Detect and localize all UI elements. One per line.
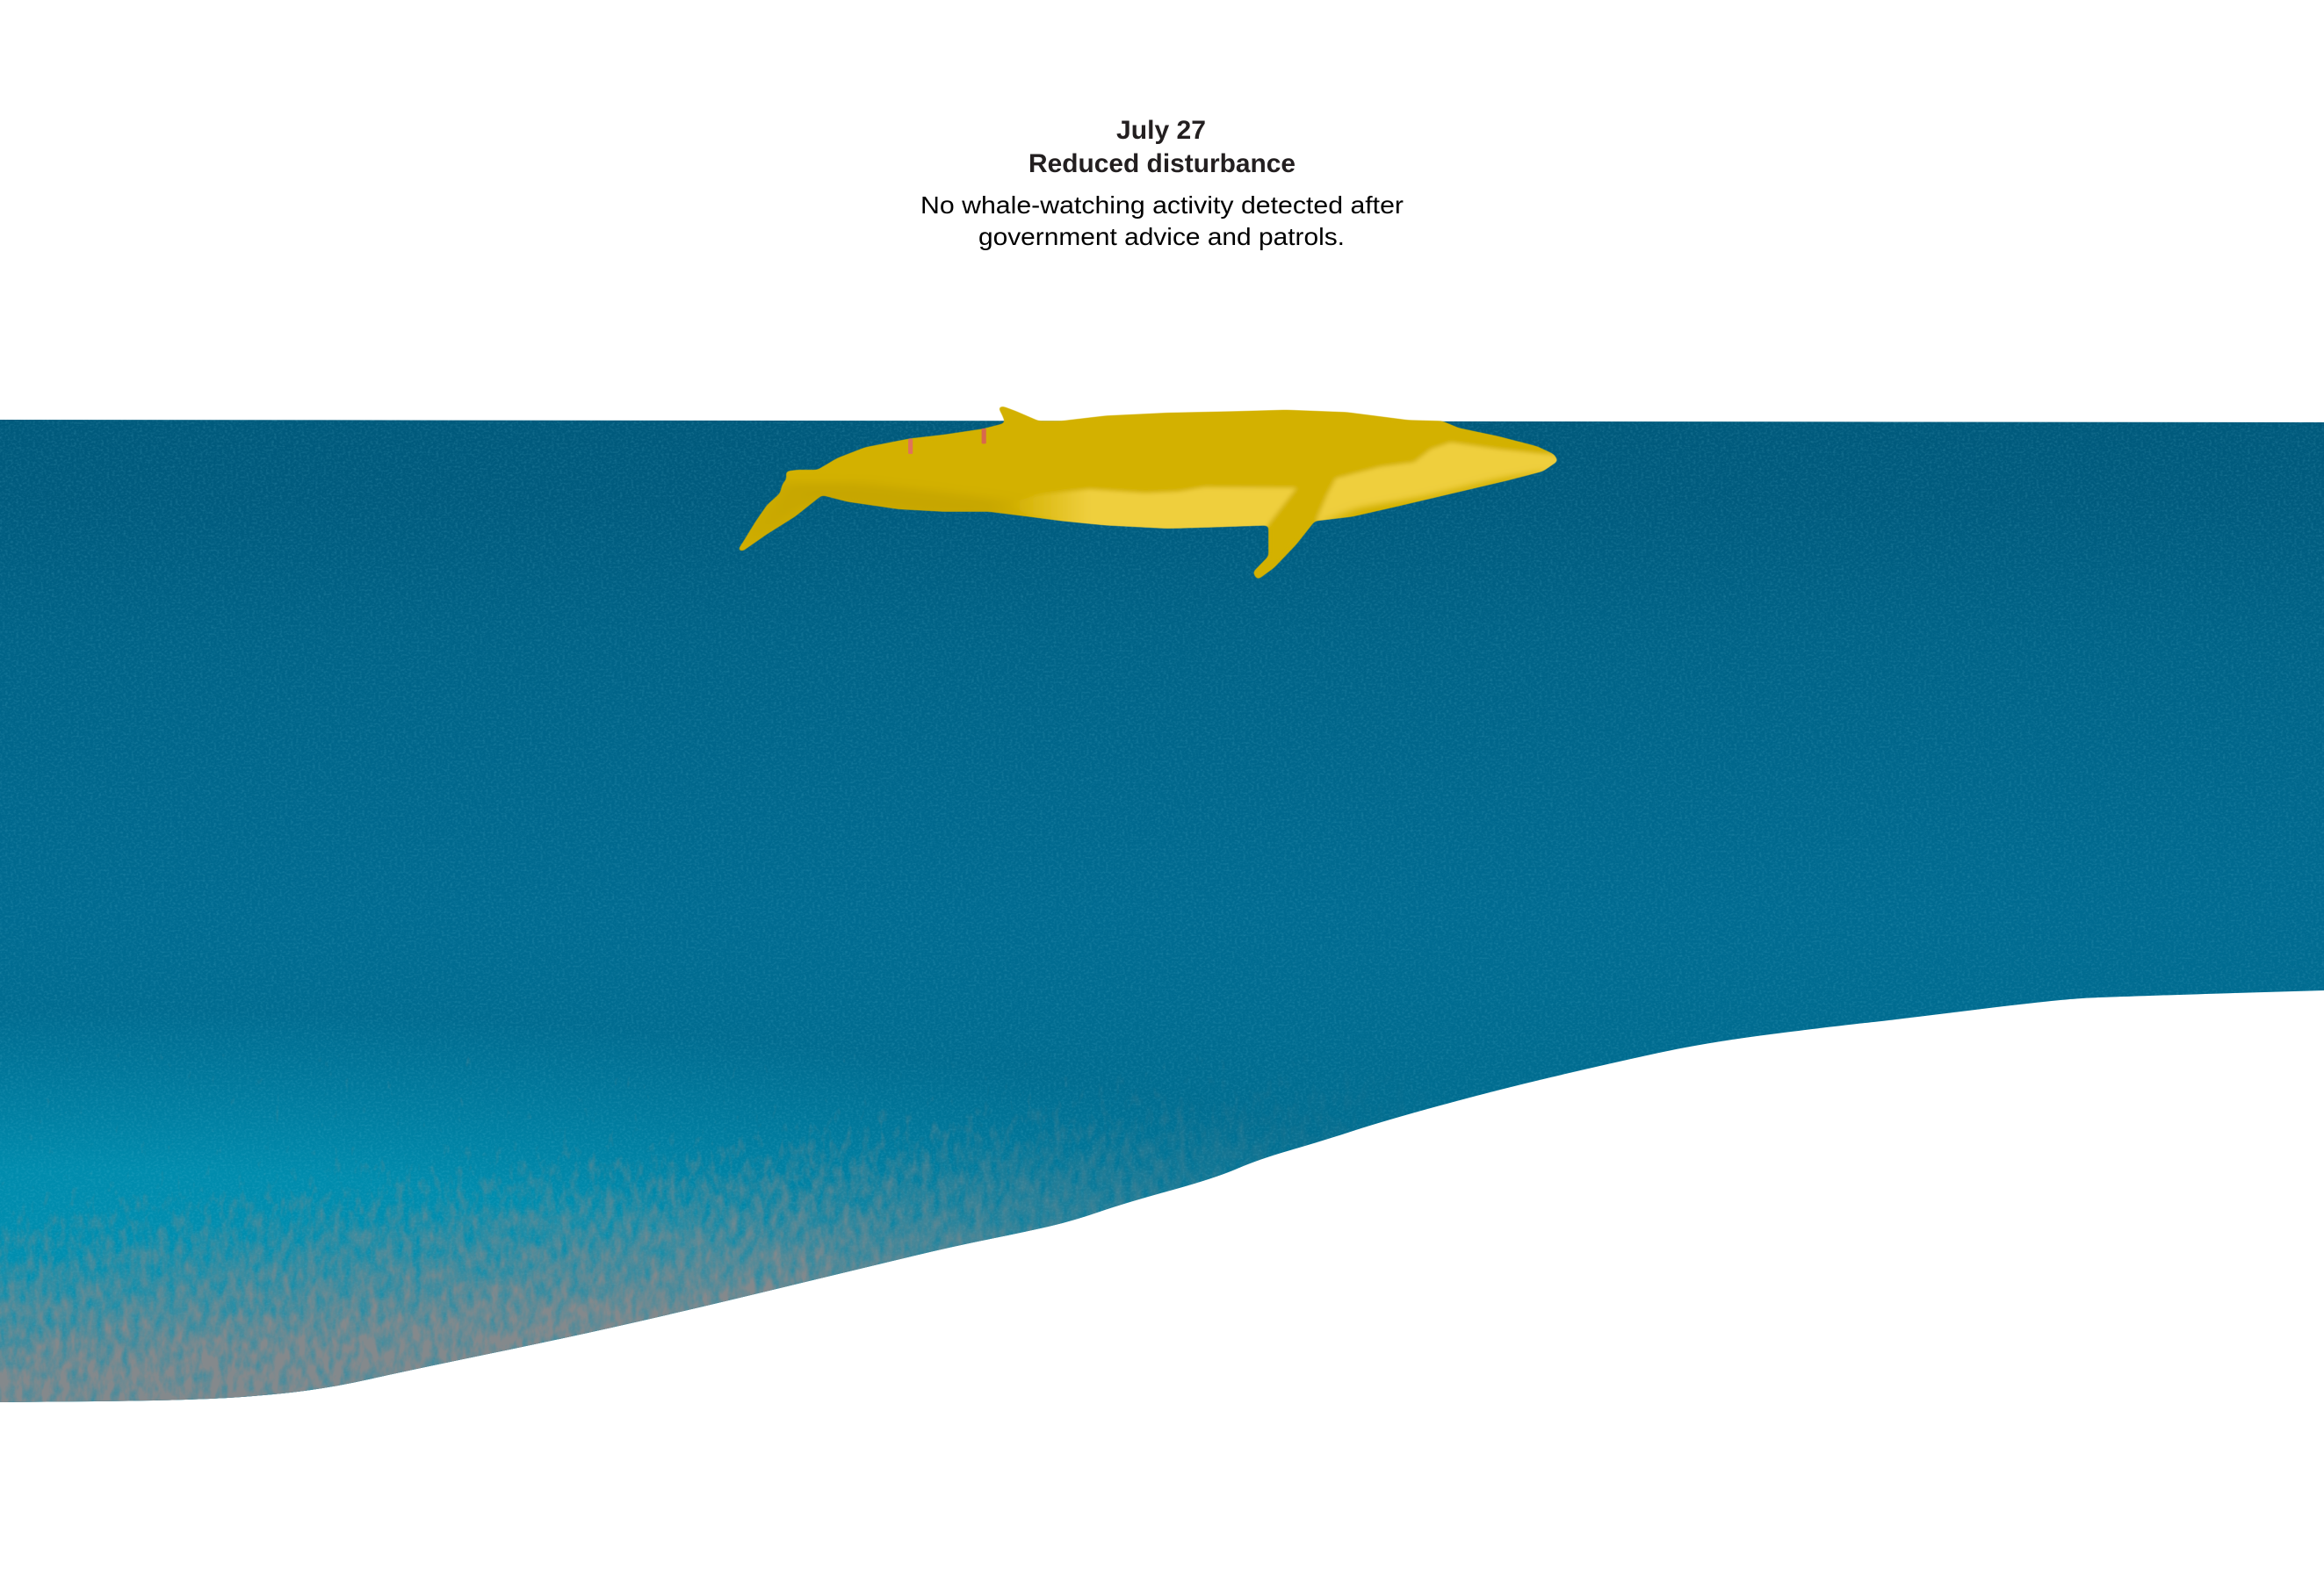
throat lower shading xyxy=(1322,470,1548,522)
red scar mark, near dorsal fin xyxy=(982,428,986,443)
light belly, rear section xyxy=(1008,487,1296,529)
light belly, throat section xyxy=(1316,443,1558,521)
description line 2: government advice and patrols. xyxy=(978,223,1345,250)
ocean cross-section with seabed edge xyxy=(0,420,2324,1414)
red scar mark, rear xyxy=(908,439,913,454)
date heading: July 27 xyxy=(1116,116,1206,145)
flipper xyxy=(1252,477,1336,580)
caption block xyxy=(920,116,1404,250)
description line 1: No whale-watching activity detected after xyxy=(920,191,1404,219)
whale illustration xyxy=(736,406,1558,580)
rear body shading xyxy=(756,485,1007,534)
whale body xyxy=(738,406,1558,551)
event heading: Reduced disturbance xyxy=(1028,149,1296,178)
